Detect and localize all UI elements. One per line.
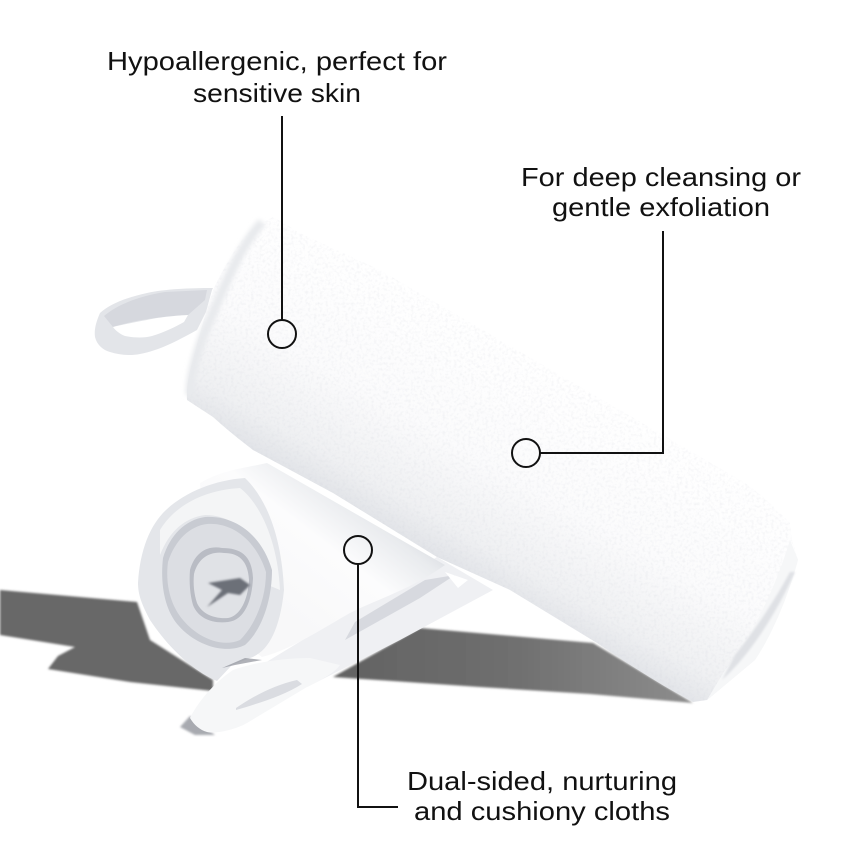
callout: dual-sided (344, 536, 677, 826)
marker (344, 536, 372, 564)
cast shadow (0, 590, 693, 735)
callout: deep cleansing: gentle exfoliation (552, 192, 770, 222)
towel tail strip (250, 557, 493, 687)
towel texture (187, 217, 798, 702)
towel hole (113, 315, 188, 338)
callout text: Dual-sided, nurturing (407, 766, 677, 796)
callout text: Hypoallergenic, perfect for (107, 46, 447, 76)
towel body (200, 463, 445, 657)
callout: hypoallergenic (107, 46, 447, 348)
towel end fold (707, 540, 798, 700)
marker (268, 320, 296, 348)
towel loop (95, 288, 213, 355)
leader line (540, 231, 663, 453)
towel roll outer (138, 478, 284, 681)
towel roll core fold (207, 578, 250, 607)
towel loop (190, 658, 340, 733)
callout: deep cleansing (512, 162, 801, 467)
towel roll outer rim (160, 488, 280, 590)
towel left edge shade (190, 222, 262, 395)
callout text: For deep cleansing or (521, 162, 801, 192)
leader line (281, 116, 283, 320)
callout: hypoallergenic: sensitive skin (193, 78, 361, 108)
towel roll ring 3 (190, 547, 253, 622)
callout: dual-sided: and cushiony cloths (414, 796, 670, 826)
leader line (358, 564, 398, 807)
marker (512, 439, 540, 467)
icon: lower rolled towel (138, 463, 493, 733)
towel body (187, 217, 798, 702)
icon: upper rolled towel (95, 217, 798, 702)
towel roll ring 2 (162, 517, 272, 649)
